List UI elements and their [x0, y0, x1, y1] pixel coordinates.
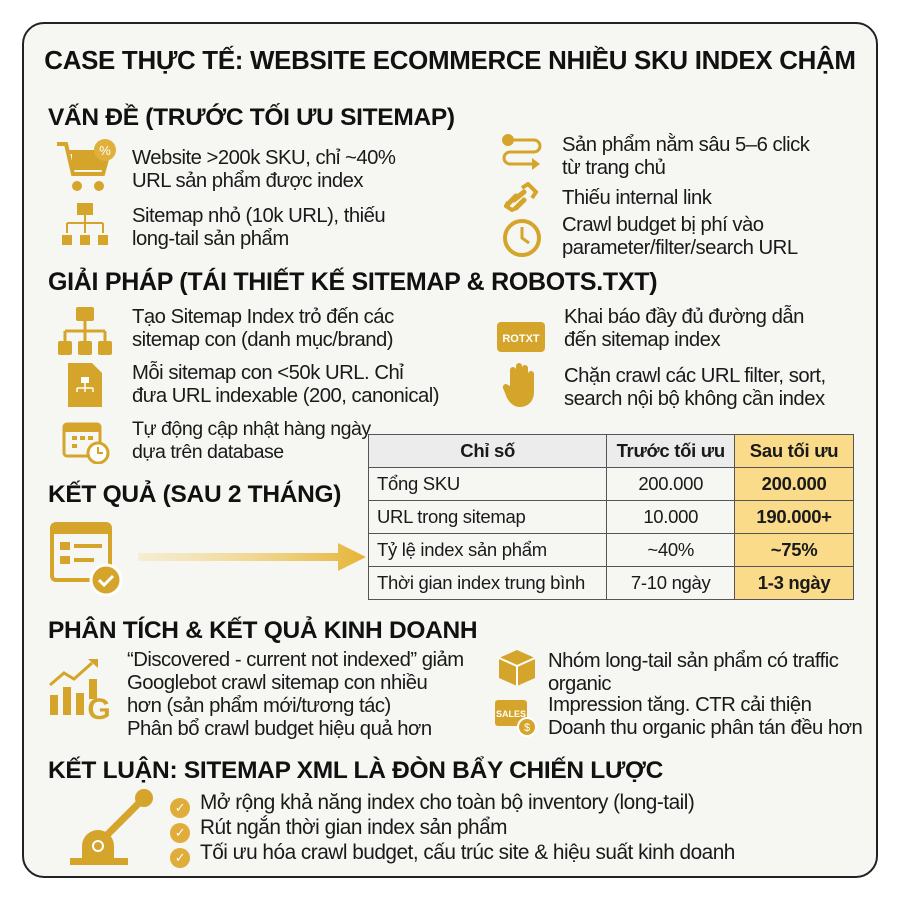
text: problem 4: Thiếu internal link: [562, 187, 711, 209]
table: results: Sau tối ưu: [750, 440, 838, 461]
bullet 2: Rút ngắn thời gian index sản phẩm: [200, 816, 507, 839]
heading: giải pháp: GIẢI PHÁP (TÁI THIẾT KẾ SITEMAP & ROBOTS.TXT): [48, 268, 657, 296]
icon: hierarchy small: [62, 203, 108, 245]
heading: vấn đề: VẤN ĐỀ (TRƯỚC TỐI ƯU SITEMAP): [48, 104, 455, 131]
heading: kết luận: KẾT LUẬN: SITEMAP XML LÀ ĐÒN BẨY CHIẾN LƯỢC: [48, 757, 663, 784]
icon: path: [502, 134, 542, 170]
text: problem 1: Website >200k SKU, chỉ ~40%: [132, 147, 395, 169]
table: results: Tổng SKU: [377, 473, 460, 494]
text: solution 5: [564, 365, 826, 410]
icon: box: [499, 650, 535, 686]
table: results: 7-10 ngày: [631, 572, 710, 593]
text: problem 5: [562, 214, 798, 259]
heading: phân tích: PHÂN TÍCH & KẾT QUẢ KINH DOANH: [48, 617, 477, 644]
table: results: Trước tối ưu: [617, 440, 725, 461]
table: results: 190.000+: [756, 506, 832, 527]
bullet 1: ✓: [175, 800, 185, 815]
text: solution 5: Chặn crawl các URL filter, sort,: [564, 365, 826, 387]
table: results: ~75%: [771, 539, 817, 560]
icon: growth chart G: [49, 659, 111, 721]
text: analysis left: hơn (sản phẩm mới/tương tác): [127, 695, 391, 717]
icon: cart: [57, 139, 116, 191]
table: results: [368, 434, 854, 600]
text: analysis left: “Discovered - current not indexed” giảm: [127, 649, 464, 671]
icon: report check: [50, 522, 122, 596]
table: results: ~40%: [647, 539, 694, 560]
text: problem 2: long-tail sản phẩm: [132, 228, 289, 250]
bullet 1: Mở rộng khả năng index cho toàn bộ inventory (long-tail): [200, 791, 694, 814]
text: problem 2: Sitemap nhỏ (10k URL), thiếu: [132, 205, 385, 227]
text: problem 1: URL sản phẩm được index: [132, 170, 363, 192]
icon: link: [504, 182, 538, 212]
text: solution 2: [132, 361, 439, 407]
heading: kết quả: KẾT QUẢ (SAU 2 THÁNG): [48, 481, 341, 508]
text: solution 2: Mỗi sitemap con <50k URL. Chỉ: [132, 362, 403, 384]
text: solution 1: Tạo Sitemap Index trỏ đến các: [132, 306, 394, 328]
icon: sales: [495, 700, 537, 737]
text: problem 3: từ trang chủ: [562, 157, 665, 179]
table: results: 10.000: [643, 506, 698, 527]
text: analysis left: [127, 649, 464, 740]
icon: cart: %: [99, 143, 111, 158]
text: solution 4: Khai báo đầy đủ đường dẫn: [564, 306, 804, 328]
text: problem 2: [132, 205, 385, 250]
text: problem 5: parameter/filter/search URL: [562, 237, 798, 259]
bullet 2: ✓: [175, 825, 185, 840]
text: analysis right 2: [548, 694, 862, 739]
text: solution 3: Tự động cập nhật hàng ngày: [132, 418, 371, 440]
text: analysis right 1: Nhóm long-tail sản phẩm có traffic: [548, 650, 838, 672]
text: analysis right 1: organic: [548, 673, 611, 695]
icon: calendar: [62, 422, 110, 464]
text: problem 3: Sản phẩm nằm sâu 5–6 click: [562, 134, 809, 156]
text: analysis left: Phân bổ crawl budget hiệu quả hơn: [127, 718, 432, 740]
icon: sitemap index: [58, 307, 112, 355]
table: results: Tỷ lệ index sản phẩm: [377, 539, 547, 560]
text: analysis right 2: Impression tăng. CTR cải thiện: [548, 694, 811, 716]
icon: sales: SALES: [496, 709, 526, 719]
text: solution 4: đến sitemap index: [564, 329, 720, 351]
table: results: URL trong sitemap: [377, 506, 525, 527]
icon: robots txt: [497, 322, 545, 352]
text: problem 3: [562, 133, 810, 179]
icon: hand: [502, 363, 534, 407]
table: results: Thời gian index trung bình: [377, 572, 585, 593]
text: problem 5: Crawl budget bị phí vào: [562, 214, 764, 236]
icon: clock: [503, 219, 541, 257]
icon: lever: [70, 789, 153, 865]
icon: sales: $: [524, 722, 530, 734]
icon: robots txt: ROTXT: [502, 333, 540, 345]
text: solution 4: [564, 305, 804, 351]
text: analysis right 2: Doanh thu organic phân tán đều hơn: [548, 717, 862, 739]
text: solution 1: sitemap con (danh mục/brand): [132, 329, 393, 351]
text: solution 3: [132, 418, 372, 463]
text: analysis left: Googlebot crawl sitemap con nhiều: [127, 672, 427, 694]
table: results: 200.000: [638, 473, 703, 494]
table: results: 1-3 ngày: [758, 572, 830, 593]
icon: file: [68, 363, 102, 407]
text: solution 1: [132, 306, 394, 351]
list: conclusions: [170, 791, 735, 868]
title: CASE THỰC TẾ: WEBSITE ECOMMERCE NHIỀU SKU INDEX CHẬM: [44, 47, 856, 75]
text: solution 5: search nội bộ không cần index: [564, 388, 825, 410]
arrow: [138, 543, 366, 571]
text: problem 1: [132, 147, 396, 192]
text: solution 3: dựa trên database: [132, 441, 284, 463]
bullet 3: Tối ưu hóa crawl budget, cấu trúc site & hiệu suất kinh doanh: [200, 841, 735, 864]
table: results: 200.000: [762, 473, 826, 494]
table: results: Chỉ số: [460, 440, 515, 461]
text: solution 2: đưa URL indexable (200, canonical): [132, 385, 439, 407]
bullet 3: ✓: [175, 850, 185, 865]
text: analysis right 1: [548, 650, 838, 695]
